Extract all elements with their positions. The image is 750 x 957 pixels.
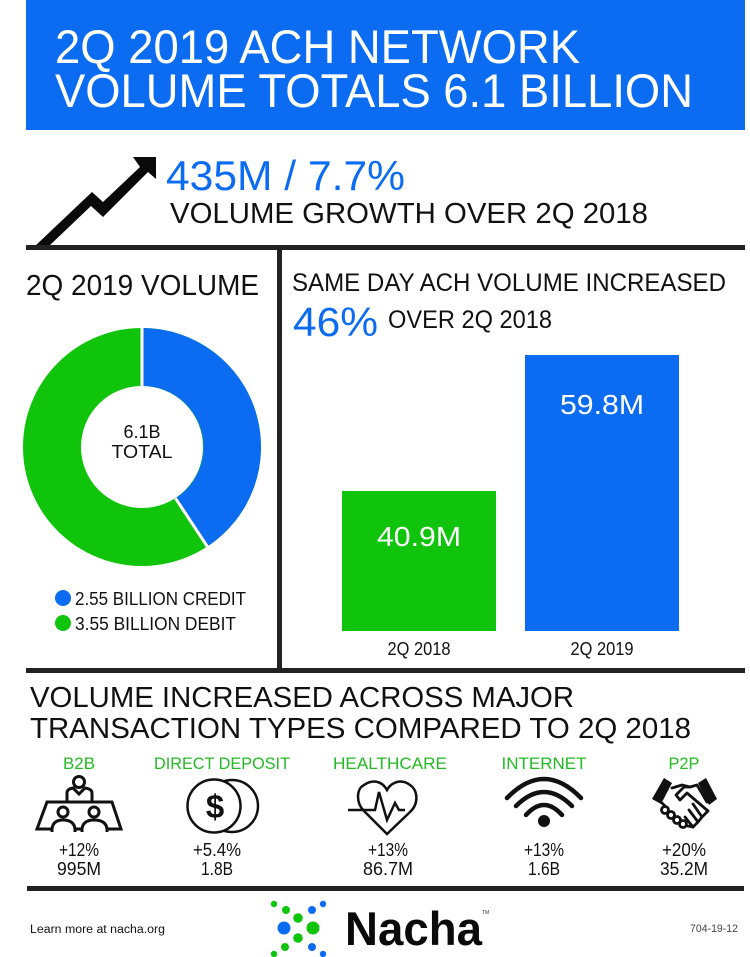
document code: 704-19-12 [690,923,738,935]
donut chart: 6.1B [123,422,161,442]
item: internet: +13% [524,840,564,860]
Nacha logo: TM [482,910,489,916]
legend: 2.55 BILLION CREDIT [75,589,246,609]
title banner: 2Q 2019 ACH NETWORK [55,20,580,73]
growth callout: VOLUME GROWTH OVER 2Q 2018 [170,198,648,230]
bar chart: 2Q 2019 [570,639,634,659]
heading: 2Q 2019 volume: 2Q 2019 VOLUME [26,270,259,302]
growth callout: 435M / 7.7% [166,152,405,199]
item: healthcare: HEALTHCARE [333,754,447,773]
item: direct deposit: +5.4% [193,840,241,860]
item: internet: INTERNET [502,754,586,773]
item: internet: 1.6B [528,859,560,879]
item: healthcare: 86.7M [363,859,413,879]
item: P2P [652,754,717,879]
heading: same day ACH: 46% [293,299,378,345]
donut chart [52,326,261,548]
item: direct deposit: $ [206,788,224,825]
item: healthcare [333,754,447,879]
item: B2B: +12% [59,840,99,860]
item: direct deposit [154,754,290,879]
bar chart: 2Q 2018 [388,639,450,659]
bar chart: 59.8M [560,389,644,420]
heading: same day ACH [292,269,726,345]
title banner: VOLUME TOTALS 6.1 BILLION [55,64,693,117]
bar chart: 40.9M [377,521,461,552]
heading: same day ACH: OVER 2Q 2018 [388,306,552,334]
item: internet [502,754,586,879]
bar chart [342,355,679,659]
item: B2B [37,754,121,879]
heading: transaction types [30,682,691,745]
icon: rising arrow [35,157,156,246]
footer link text: Learn more at nacha.org [30,924,165,936]
item: B2B: B2B [63,754,95,773]
legend: 3.55 BILLION DEBIT [75,614,236,634]
heading: same day ACH: SAME DAY ACH VOLUME INCREASED [292,269,726,297]
item: P2P: P2P [668,754,700,773]
Nacha logo: Nacha [345,902,483,955]
item: direct deposit: 1.8B [201,859,233,879]
donut chart: TOTAL [112,442,172,462]
heading: transaction types: VOLUME INCREASED ACROSS MAJOR [30,682,574,714]
item: P2P: 35.2M [660,859,708,879]
Nacha logo [271,901,489,957]
title banner [26,0,745,130]
item: direct deposit: DIRECT DEPOSIT [154,754,290,773]
item: healthcare: +13% [368,840,408,860]
item: B2B: 995M [57,859,101,879]
growth callout [166,152,648,230]
legend [55,589,246,634]
item: P2P: +20% [662,840,706,860]
heading: transaction types: TRANSACTION TYPES COMPARED TO 2Q 2018 [30,713,691,745]
